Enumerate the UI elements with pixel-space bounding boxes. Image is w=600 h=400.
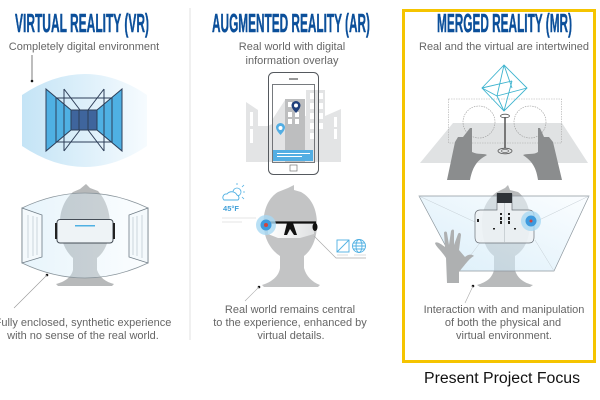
- AR description bottom: Real world remains central: [225, 304, 355, 316]
- panel: virtual reality: [0, 10, 171, 342]
- MR description bottom: of both the physical and: [445, 317, 561, 329]
- headset front: [475, 194, 534, 243]
- glasses frame: [268, 221, 316, 224]
- head silhouette: [56, 184, 114, 286]
- head silhouette: [477, 185, 533, 287]
- map pins: [292, 101, 300, 113]
- MR description bottom: virtual environment.: [456, 330, 552, 342]
- phone and city illustration: [246, 72, 341, 174]
- projected plane: [419, 196, 589, 271]
- MR description top: Real and the virtual are intertwined: [419, 41, 589, 53]
- head silhouette: [262, 185, 320, 287]
- AR head with glasses: [222, 183, 366, 301]
- phone: [268, 72, 318, 174]
- panel: merged reality: [404, 10, 594, 362]
- MR head with projected display: [419, 185, 589, 303]
- AR description top: information overlay: [246, 55, 339, 67]
- digital environment illustration: [22, 74, 147, 167]
- info card: [273, 150, 313, 161]
- weather icon: [223, 183, 245, 213]
- AR description bottom: to the experience, enhanced by: [213, 317, 367, 329]
- VR description top: Completely digital environment: [9, 41, 159, 53]
- VR description bottom: with no sense of the real world.: [6, 330, 159, 342]
- lens: [268, 223, 314, 238]
- text: AUGMENTED REALITY (AR): [212, 10, 370, 38]
- enclosure: [22, 193, 148, 278]
- AR description bottom: virtual details.: [257, 330, 325, 342]
- panel: augmented reality: [212, 10, 370, 342]
- VR headset illustration: [14, 184, 148, 308]
- glow: [521, 211, 541, 231]
- MR description bottom: Interaction with and manipulation: [424, 304, 584, 316]
- icons: square and globe: [337, 240, 366, 255]
- weather icon: 45°F: [223, 204, 239, 213]
- caption: Present Project Focus: [424, 370, 580, 387]
- hands and octahedron illustration: [420, 65, 588, 180]
- callout line: [31, 55, 33, 82]
- visor: [57, 220, 113, 243]
- yellow highlight frame: [404, 10, 594, 362]
- glow: [256, 215, 276, 235]
- raised hand: [435, 230, 474, 283]
- panel: virtual reality: VIRTUAL REALITY (VR): [15, 10, 149, 38]
- AR description top: Real world with digital: [239, 41, 345, 53]
